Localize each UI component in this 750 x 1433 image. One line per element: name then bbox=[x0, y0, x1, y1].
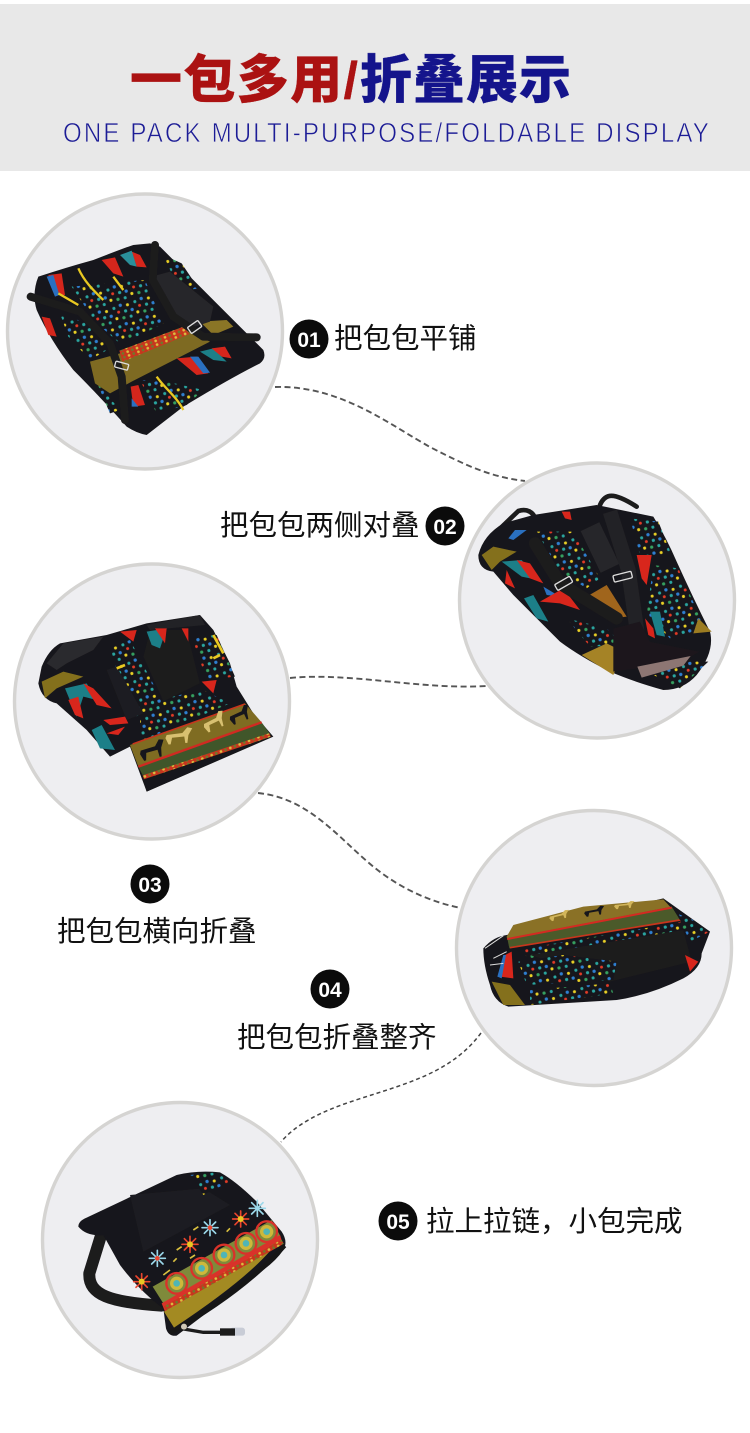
step 05 label bbox=[378, 1202, 683, 1240]
step 01 label: 01 bbox=[297, 329, 321, 352]
step 03 label bbox=[57, 864, 257, 948]
step 04 label: 04 bbox=[318, 979, 342, 1002]
photo circle 4: folded neatly bbox=[456, 810, 732, 1086]
step 03 label: 03 bbox=[138, 874, 162, 897]
step 03 label: 把包包横向折叠 bbox=[57, 916, 257, 948]
step 02 label bbox=[220, 506, 464, 546]
photo circle 5: finished pouch bbox=[42, 1102, 318, 1378]
step 04 label bbox=[237, 970, 437, 1054]
header band bbox=[0, 4, 750, 171]
dashed connector 1 to 2 bbox=[275, 387, 525, 481]
dashed connector 2 to 3 bbox=[290, 677, 487, 687]
step 02 label: 02 bbox=[433, 516, 457, 539]
step 05 label: 拉上拉链，小包完成 bbox=[426, 1206, 683, 1238]
subtitle: ONE PACK MULTI-PURPOSE/FOLDABLE DISPLAY bbox=[63, 116, 709, 148]
photo circle 2: sides folded bbox=[460, 463, 734, 738]
title: 折叠展示 bbox=[360, 52, 571, 110]
dashed connector 3 to 4 bbox=[258, 793, 461, 908]
dashed connector 4 to 5 bbox=[281, 1033, 481, 1142]
step 04 label: 把包包折叠整齐 bbox=[237, 1022, 437, 1054]
photo circle 1: bag laid flat bbox=[8, 194, 282, 469]
step 01 label: 把包包平铺 bbox=[334, 323, 477, 355]
step 05 label: 05 bbox=[386, 1211, 410, 1234]
title: 一包多用/ bbox=[130, 52, 358, 110]
step 01 label bbox=[290, 320, 477, 358]
photo circle 3: folded crosswise bbox=[14, 564, 290, 839]
step 02 label: 把包包两侧对叠 bbox=[220, 510, 420, 542]
